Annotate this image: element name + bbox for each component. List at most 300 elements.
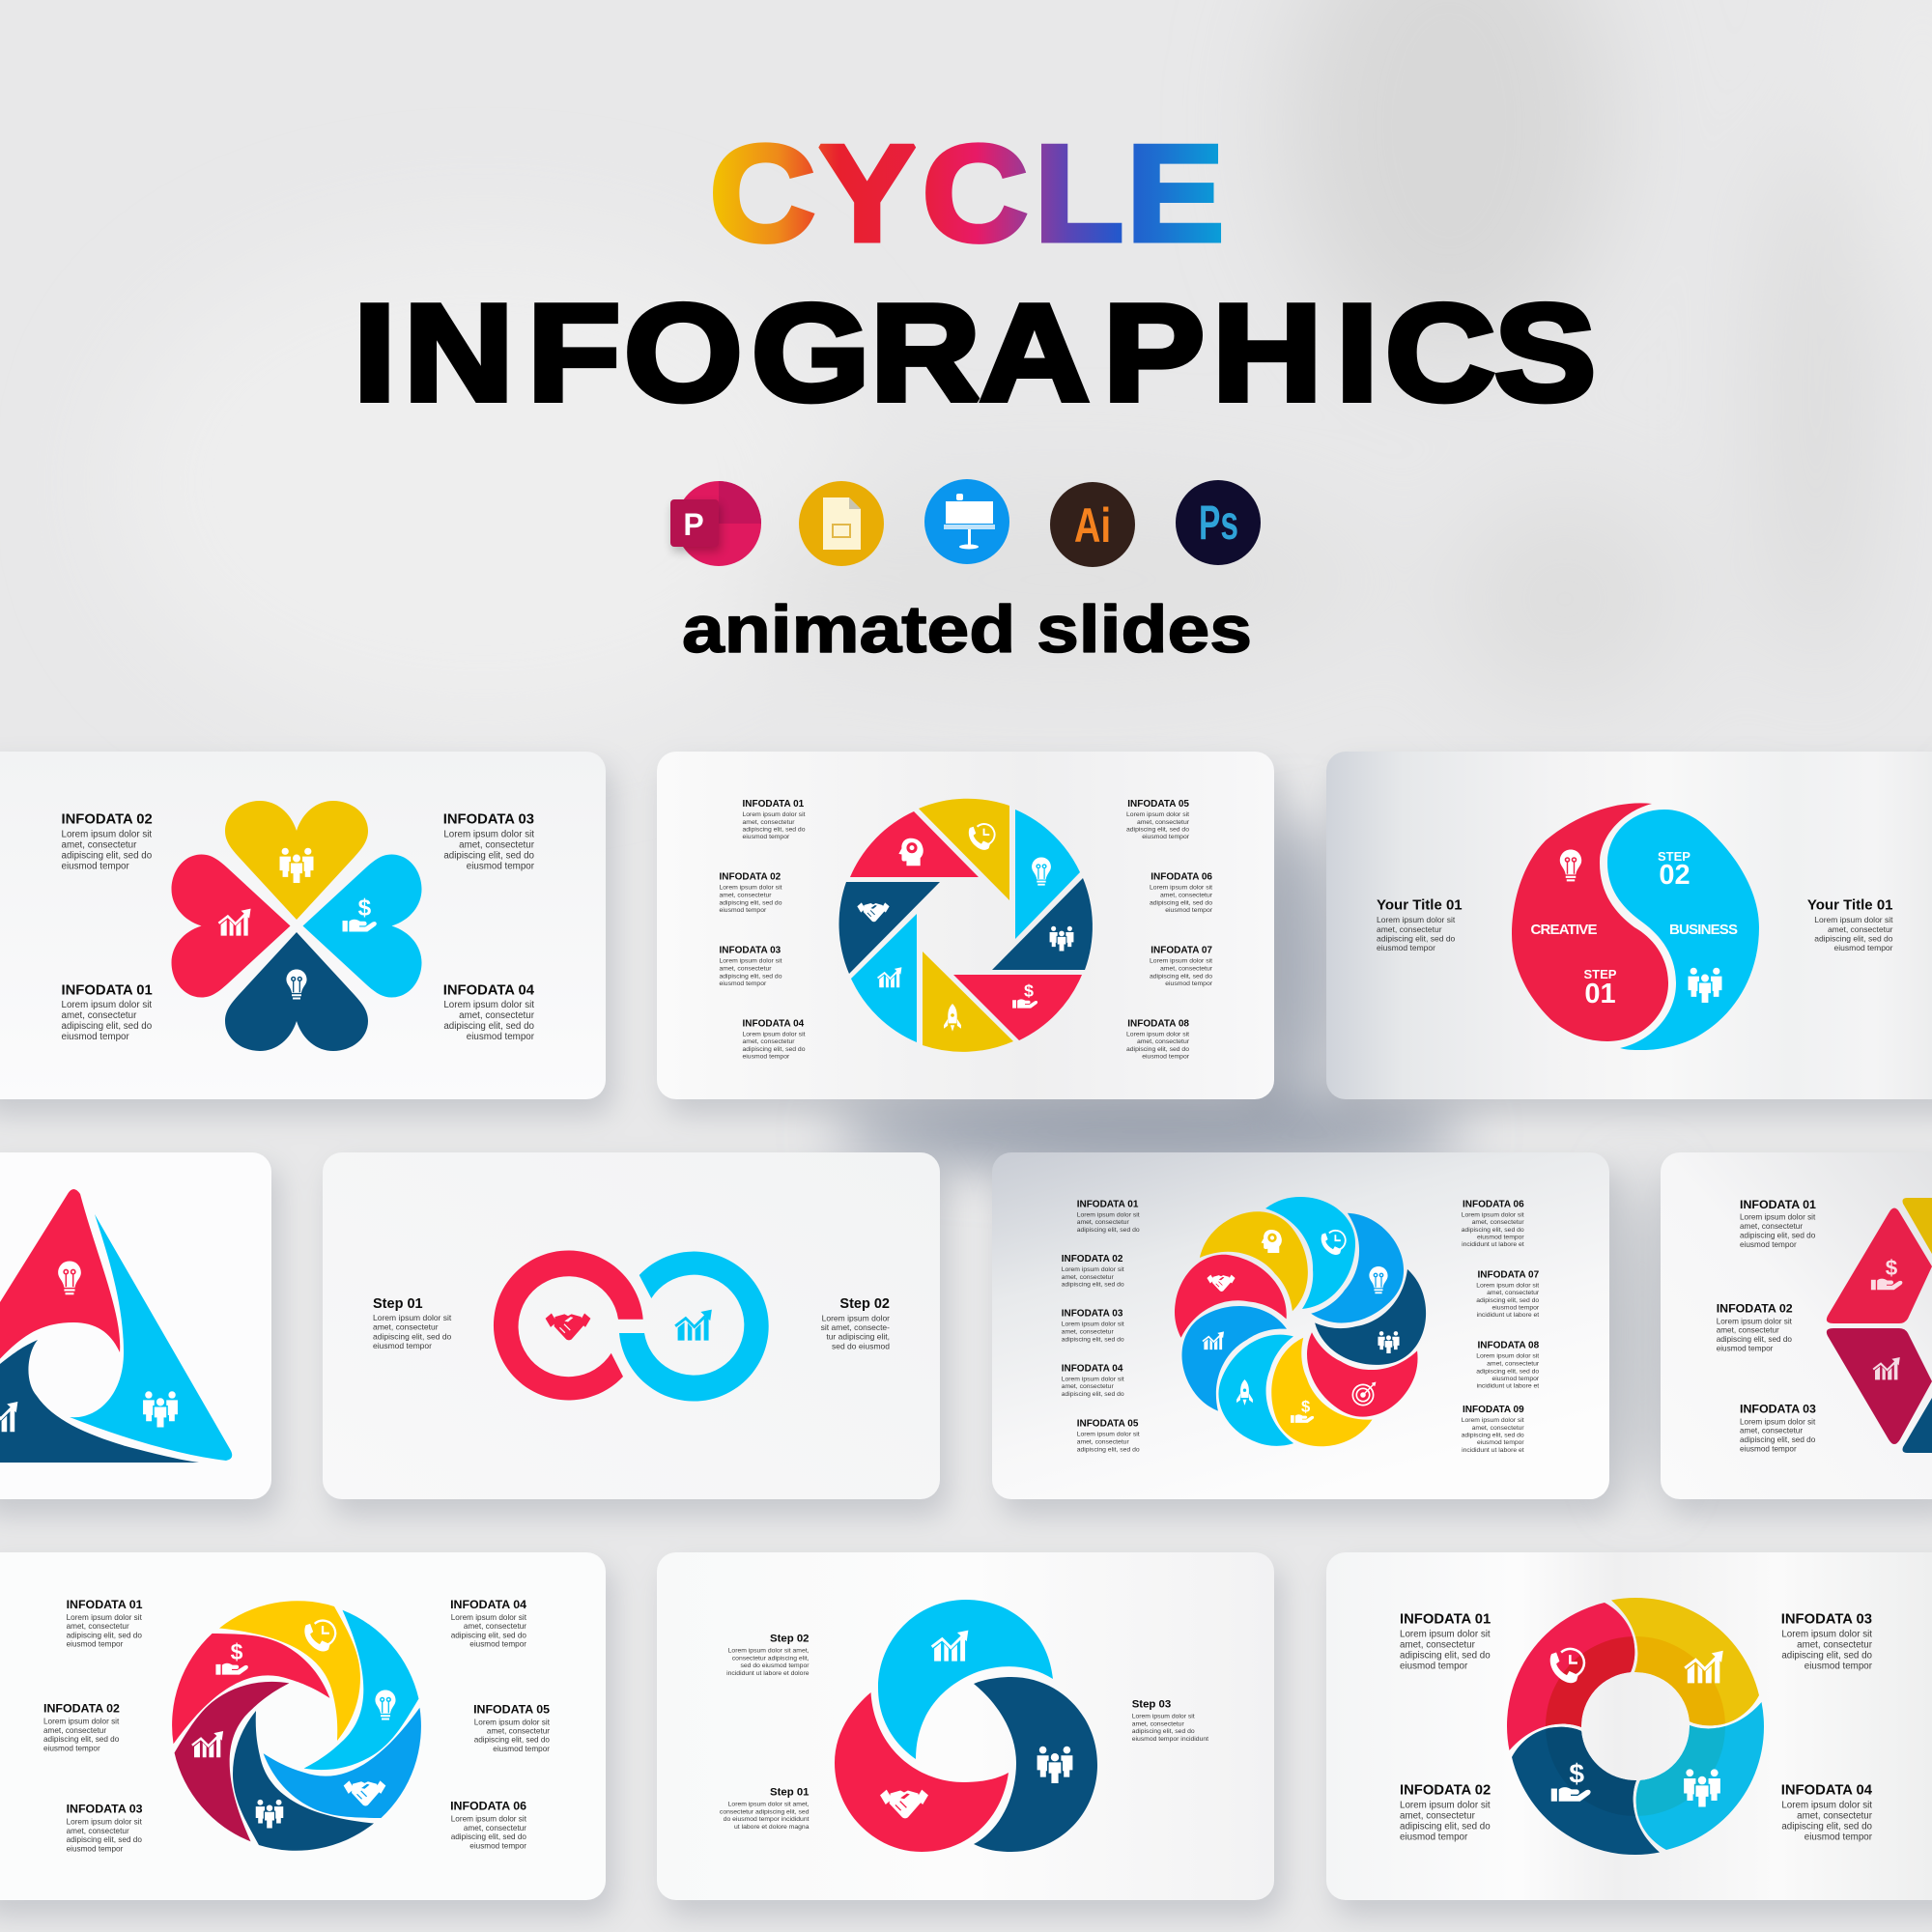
text: INFODATA 08: Lorem ipsum dolor sit — [1126, 1031, 1189, 1037]
text: left title: Lorem ipsum dolor sit — [1377, 915, 1455, 924]
text: step 01: ut labore et dolore magna — [734, 1824, 810, 1831]
text: INFODATA 03: adipiscing elit, sed do — [443, 851, 535, 862]
text: INFODATA 02: adipiscing elit, sed do — [719, 899, 782, 906]
icon: handshake — [546, 1314, 590, 1340]
text: INFODATA 02: INFODATA 02 — [43, 1702, 120, 1716]
text: INFODATA 03: adipiscing elit, sed do — [67, 1835, 142, 1844]
text: INFODATA 01: amet, consectetur — [62, 1010, 137, 1021]
text: INFODATA 02: eiusmod tempor — [62, 862, 129, 872]
text: INFODATA 01: Lorem ipsum dolor sit — [62, 1000, 152, 1010]
text: INFODATA 02: amet, consectetur — [1717, 1326, 1779, 1335]
text: INFODATA 02: INFODATA 02 — [62, 811, 153, 827]
text: INFODATA 06 — [1462, 1199, 1524, 1248]
text: INFODATA 08: amet, consectetur — [1137, 1038, 1190, 1045]
text: INFODATA 02: amet, consectetur — [719, 893, 772, 898]
text: step 01: adipiscing elit, sed do — [373, 1331, 452, 1341]
text: INFODATA 05: adipiscing elit, sed do — [1126, 827, 1189, 834]
text: INFODATA 02 — [1062, 1254, 1124, 1289]
text: INFODATA 02: adipiscing elit, sed do — [1717, 1335, 1792, 1344]
icon: Illustrator — [1050, 482, 1135, 567]
subtitle: animated slides — [682, 592, 1252, 667]
text: INFODATA 07: eiusmod tempor — [1492, 1304, 1540, 1312]
text: INFODATA 05: Lorem ipsum dolor sit — [474, 1718, 550, 1726]
icon: head gear — [898, 838, 923, 866]
text: INFODATA 06: adipiscing elit, sed do — [451, 1833, 526, 1841]
chart: heart clover — [172, 801, 421, 1051]
text: INFODATA 06 — [1150, 872, 1213, 914]
text: INFODATA 05: eiusmod tempor — [493, 1745, 550, 1753]
text: INFODATA 06: adipiscing elit, sed do — [1150, 899, 1212, 906]
text: INFODATA 07: adipiscing elit, sed do — [1150, 973, 1212, 980]
text: INFODATA 06: amet, consectetur — [1472, 1219, 1524, 1226]
icon: Photoshop — [1176, 480, 1261, 565]
panel: six blade swirl slide — [0, 1552, 606, 1900]
text: INFODATA 01: INFODATA 01 — [62, 982, 153, 998]
text: INFODATA 04: amet, consectetur — [464, 1622, 526, 1631]
text: INFODATA 09 — [1462, 1405, 1524, 1454]
text: INFODATA 01 — [1740, 1198, 1816, 1249]
text: INFODATA 01: eiusmod tempor — [67, 1640, 124, 1649]
text: INFODATA 06: eiusmod tempor — [1477, 1235, 1524, 1240]
label: step 02: STEP — [1658, 849, 1690, 864]
text: INFODATA 01: amet, consectetur — [67, 1622, 129, 1631]
text: INFODATA 01: eiusmod tempor — [62, 1032, 129, 1042]
icon: Illustrator: Ai — [1074, 498, 1111, 553]
icon: handshake — [344, 1780, 385, 1805]
text: step 02: tur adipiscing elit, — [826, 1332, 890, 1342]
icon: clock — [304, 1621, 335, 1651]
text: INFODATA 05: adipiscing elit, sed do — [1077, 1446, 1140, 1453]
text: INFODATA 08: adipiscing elit, sed do — [1476, 1368, 1539, 1375]
text: step 01: amet, consectetur — [373, 1322, 439, 1332]
text: INFODATA 08: INFODATA 08 — [1477, 1341, 1540, 1351]
icon: target — [1352, 1382, 1376, 1406]
text: INFODATA 03 — [67, 1803, 143, 1853]
text: INFODATA 05 — [473, 1702, 551, 1753]
text: INFODATA 02: Lorem ipsum dolor sit — [1400, 1801, 1491, 1811]
text: INFODATA 06: eiusmod tempor — [469, 1841, 526, 1850]
icon: chart — [932, 1631, 968, 1662]
text: INFODATA 04: eiusmod tempor — [1804, 1833, 1873, 1843]
icon: people — [1037, 1747, 1072, 1783]
text: INFODATA 03: amet, consectetur — [1797, 1640, 1873, 1651]
text: INFODATA 06: Lorem ipsum dolor sit — [1462, 1211, 1524, 1218]
icon: people — [1689, 968, 1721, 1003]
text: INFODATA 06: adipiscing elit, sed do — [1462, 1227, 1524, 1234]
text: right title: eiusmod tempor — [1834, 943, 1893, 952]
icon: handshake — [857, 902, 890, 922]
text: INFODATA 02: Lorem ipsum dolor sit — [1717, 1317, 1792, 1325]
text: INFODATA 04 — [443, 982, 535, 1042]
text: step 02 — [726, 1633, 810, 1677]
text: INFODATA 03: eiusmod tempor — [1740, 1444, 1797, 1453]
text: step 02: Step 02 — [770, 1633, 810, 1644]
chart: infinity rings — [494, 1250, 769, 1402]
text: INFODATA 02: adipiscing elit, sed do — [1400, 1822, 1491, 1833]
text: INFODATA 04: Lorem ipsum dolor sit — [1062, 1376, 1124, 1382]
text: INFODATA 07: INFODATA 07 — [1477, 1269, 1540, 1280]
text: INFODATA 01: amet, consectetur — [1077, 1219, 1129, 1226]
text: INFODATA 04: INFODATA 04 — [450, 1598, 526, 1611]
text: INFODATA 04: adipiscing elit, sed do — [742, 1046, 806, 1053]
text: INFODATA 01 — [742, 799, 806, 840]
text: INFODATA 01: adipiscing elit, sed do — [1740, 1231, 1816, 1239]
text: right title — [1807, 897, 1893, 952]
text: INFODATA 04: amet, consectetur — [459, 1010, 535, 1021]
text: step 01: do eiusmod tempor incididunt — [724, 1816, 810, 1823]
text: INFODATA 04: amet, consectetur — [1797, 1811, 1873, 1822]
text: INFODATA 05: Lorem ipsum dolor sit — [1126, 811, 1189, 818]
text: INFODATA 09: incididunt ut labore et — [1462, 1447, 1524, 1454]
text: INFODATA 08 — [1476, 1341, 1540, 1389]
text: INFODATA 09: eiusmod tempor — [1477, 1439, 1524, 1446]
panel: triangle swirl slide — [0, 1152, 271, 1499]
title: INFOGRAPHICS: INFOGRAPHICS — [354, 275, 1596, 429]
text: step 01: consectetur adipiscing elit, sed — [720, 1808, 810, 1815]
text: INFODATA 04: Lorem ipsum dolor sit — [443, 1000, 534, 1010]
text: left title — [1377, 897, 1463, 952]
text: INFODATA 03: amet, consectetur — [719, 966, 772, 972]
text: INFODATA 08 — [1126, 1018, 1190, 1061]
text: INFODATA 01: adipiscing elit, sed do — [62, 1021, 153, 1032]
text: step 02: sit amet, consecte- — [821, 1322, 890, 1332]
text: INFODATA 08: incididunt ut labore et — [1477, 1383, 1539, 1389]
text: INFODATA 07: amet, consectetur — [1487, 1290, 1540, 1296]
text: INFODATA 03: eiusmod tempor — [467, 862, 535, 872]
text: INFODATA 04: amet, consectetur — [742, 1038, 795, 1045]
icon: people — [256, 1800, 283, 1828]
icon: handshake — [880, 1790, 928, 1818]
text: INFODATA 05 — [1077, 1419, 1140, 1453]
icon: Photoshop: Ps — [1199, 496, 1238, 550]
text: INFODATA 02: Lorem ipsum dolor sit — [1062, 1266, 1124, 1273]
text: INFODATA 05 — [1126, 799, 1190, 840]
chart: three crescents — [835, 1600, 1097, 1852]
text: INFODATA 08: INFODATA 08 — [1127, 1018, 1189, 1029]
panel: nine petal swirl slide — [992, 1152, 1609, 1499]
label: creative: CREATIVE — [1530, 922, 1598, 938]
text: INFODATA 03: Lorem ipsum dolor sit — [67, 1818, 142, 1827]
text: right title: amet, consectetur — [1828, 924, 1893, 934]
text: INFODATA 02: amet, consectetur — [43, 1726, 106, 1735]
text: INFODATA 02: Lorem ipsum dolor sit — [719, 885, 781, 892]
text: INFODATA 02: eiusmod tempor — [43, 1744, 100, 1752]
icon: people — [143, 1391, 178, 1428]
text: INFODATA 05: amet, consectetur — [487, 1727, 550, 1735]
text: INFODATA 07: Lorem ipsum dolor sit — [1150, 958, 1212, 965]
text: INFODATA 03 — [1781, 1611, 1873, 1672]
text: step 02: consectetur adipiscing elit, — [732, 1655, 810, 1662]
chart: hexagon segments — [1827, 1198, 1932, 1453]
icon: people — [1050, 926, 1073, 951]
panel: three crescents slide — [657, 1552, 1274, 1900]
text: INFODATA 01: adipiscing elit, sed do — [67, 1631, 142, 1639]
panel: hexagon slide — [1661, 1152, 1932, 1499]
text: INFODATA 05: amet, consectetur — [1137, 819, 1190, 826]
icon: people — [1378, 1331, 1400, 1353]
text: INFODATA 03: INFODATA 03 — [1740, 1403, 1816, 1416]
text: INFODATA 05: Lorem ipsum dolor sit — [1077, 1432, 1140, 1438]
text: INFODATA 02 — [62, 811, 153, 872]
text: INFODATA 09: Lorem ipsum dolor sit — [1462, 1417, 1524, 1424]
text: step 03: eiusmod tempor incididunt — [1132, 1736, 1208, 1743]
icon: chart — [1873, 1357, 1900, 1379]
text: INFODATA 02: amet, consectetur — [1400, 1811, 1476, 1822]
text: INFODATA 03: eiusmod tempor — [719, 980, 767, 987]
text: step 01: Step 01 — [373, 1296, 423, 1312]
text: INFODATA 04: adipiscing elit, sed do — [451, 1631, 526, 1639]
icon: PowerPoint: P — [683, 507, 704, 542]
text: INFODATA 01: INFODATA 01 — [742, 799, 805, 810]
text: INFODATA 06: Lorem ipsum dolor sit — [1150, 885, 1212, 892]
chart: nine petal swirl — [1163, 1191, 1435, 1462]
text: INFODATA 05: INFODATA 05 — [1127, 799, 1189, 810]
icon: growth chart — [218, 909, 251, 936]
text: INFODATA 05: amet, consectetur — [1077, 1439, 1129, 1445]
text: INFODATA 03: eiusmod tempor — [67, 1844, 124, 1853]
text: INFODATA 04 — [742, 1018, 806, 1061]
text: INFODATA 07: INFODATA 07 — [1151, 946, 1212, 956]
label: step 01: STEP — [1584, 967, 1617, 981]
icon: PowerPoint — [670, 481, 761, 566]
text: INFODATA 07 — [1476, 1269, 1540, 1319]
text: INFODATA 02: amet, consectetur — [62, 840, 137, 851]
chart: yin yang — [1512, 803, 1759, 1050]
text: INFODATA 06: amet, consectetur — [464, 1824, 526, 1833]
icon: people — [280, 848, 313, 883]
icon: bulb — [1369, 1266, 1388, 1293]
text: INFODATA 03: Lorem ipsum dolor sit — [443, 830, 534, 840]
text: INFODATA 01: Lorem ipsum dolor sit — [67, 1613, 142, 1622]
text: INFODATA 01 — [1077, 1199, 1140, 1234]
text: INFODATA 01: Lorem ipsum dolor sit — [742, 811, 805, 818]
panel: infinity slide — [323, 1152, 940, 1499]
text: step 03: amet, consectetur — [1132, 1720, 1184, 1727]
icon: chart — [1685, 1651, 1723, 1683]
text: INFODATA 04: amet, consectetur — [1062, 1383, 1114, 1390]
text: right title: Lorem ipsum dolor sit — [1814, 915, 1893, 924]
text: step 02: Lorem ipsum dolor — [822, 1313, 890, 1322]
text: INFODATA 02: Lorem ipsum dolor sit — [62, 830, 152, 840]
icon: rocket — [944, 1004, 961, 1032]
text: INFODATA 04 — [1062, 1363, 1124, 1398]
text: INFODATA 02: Lorem ipsum dolor sit — [43, 1718, 119, 1726]
icon: hand — [1551, 1758, 1591, 1802]
text: INFODATA 02 — [43, 1702, 120, 1752]
text: INFODATA 01: INFODATA 01 — [67, 1598, 143, 1611]
text: INFODATA 04: eiusmod tempor — [469, 1640, 526, 1649]
text: INFODATA 02: amet, consectetur — [1062, 1274, 1114, 1281]
card drop shadows — [0, 765, 1932, 1916]
text: INFODATA 02: adipiscing elit, sed do — [43, 1735, 120, 1744]
text: step 02 — [821, 1296, 890, 1350]
text: INFODATA 01: Lorem ipsum dolor sit — [1077, 1211, 1140, 1218]
text: INFODATA 08: eiusmod tempor — [1142, 1053, 1190, 1061]
label: step 02: 02 — [1659, 860, 1690, 891]
text: INFODATA 02: adipiscing elit, sed do — [62, 851, 153, 862]
text: left title: Your Title 01 — [1377, 897, 1463, 914]
chart: six blade swirl — [150, 1597, 443, 1855]
text: step 01 — [720, 1786, 810, 1831]
text: INFODATA 01: INFODATA 01 — [1740, 1198, 1816, 1211]
icon: hand — [1871, 1256, 1902, 1290]
text: INFODATA 06: Lorem ipsum dolor sit — [451, 1815, 526, 1824]
text: INFODATA 03: amet, consectetur — [1740, 1427, 1803, 1435]
text: INFODATA 08: Lorem ipsum dolor sit — [1476, 1353, 1539, 1360]
text: INFODATA 01 — [67, 1598, 143, 1649]
text: INFODATA 03 — [1740, 1403, 1816, 1453]
text: INFODATA 04: adipiscing elit, sed do — [1781, 1822, 1873, 1833]
text: INFODATA 04: INFODATA 04 — [1781, 1782, 1873, 1798]
text: INFODATA 03: adipiscing elit, sed do — [719, 973, 782, 980]
text: INFODATA 05: INFODATA 05 — [1077, 1419, 1139, 1430]
text: step 02: Step 02 — [839, 1296, 890, 1312]
text: INFODATA 07: amet, consectetur — [1160, 966, 1213, 972]
icon: chart — [878, 967, 901, 987]
icon: Keynote — [924, 479, 1009, 564]
text: INFODATA 03: Lorem ipsum dolor sit — [1781, 1630, 1872, 1640]
background light and shadow wash — [116, 0, 1932, 1497]
text: INFODATA 03: INFODATA 03 — [1062, 1309, 1123, 1320]
text: INFODATA 03: Lorem ipsum dolor sit — [1740, 1417, 1815, 1426]
text: INFODATA 07: adipiscing elit, sed do — [1476, 1297, 1539, 1304]
text: INFODATA 06: amet, consectetur — [1160, 893, 1213, 898]
title: CYCLE: CYCLE — [709, 118, 1224, 270]
text: INFODATA 04: INFODATA 04 — [1062, 1363, 1123, 1374]
text: INFODATA 05: INFODATA 05 — [473, 1702, 550, 1716]
text: INFODATA 02 — [1717, 1302, 1793, 1352]
chart: four segment ring — [1507, 1598, 1764, 1855]
text: INFODATA 03 — [719, 946, 782, 987]
text: INFODATA 01: INFODATA 01 — [1400, 1611, 1491, 1627]
text: INFODATA 03: INFODATA 03 — [443, 811, 534, 827]
text: INFODATA 01: adipiscing elit, sed do — [1400, 1651, 1491, 1662]
software icons row — [670, 479, 1261, 567]
text: step 02: incididunt ut labore et dolore — [726, 1670, 810, 1677]
text: INFODATA 02: INFODATA 02 — [1062, 1254, 1123, 1264]
text: INFODATA 04: Lorem ipsum dolor sit — [451, 1613, 526, 1622]
text: step 01: eiusmod tempor — [373, 1341, 432, 1350]
text: INFODATA 02: eiusmod tempor — [719, 907, 767, 914]
panel: heart clover slide — [0, 752, 606, 1099]
text: step 03: adipiscing elit, sed do — [1132, 1728, 1195, 1735]
text: INFODATA 02: INFODATA 02 — [719, 872, 781, 883]
text: step 01: Step 01 — [770, 1786, 810, 1798]
text: INFODATA 05: adipiscing elit, sed do — [474, 1736, 550, 1745]
text: INFODATA 05: eiusmod tempor — [1142, 834, 1190, 840]
text: step 03: Step 03 — [1132, 1699, 1171, 1711]
icon: bulb — [375, 1690, 396, 1720]
text: INFODATA 09: adipiscing elit, sed do — [1462, 1433, 1524, 1439]
text: INFODATA 06 — [450, 1800, 527, 1850]
text: INFODATA 03 — [1062, 1309, 1124, 1343]
text: INFODATA 09: INFODATA 09 — [1463, 1405, 1524, 1415]
text: INFODATA 02: eiusmod tempor — [1717, 1344, 1774, 1352]
icon: chart — [192, 1731, 223, 1757]
icon: chart — [675, 1310, 712, 1341]
text: INFODATA 04: adipiscing elit, sed do — [443, 1021, 535, 1032]
text: INFODATA 06: incididunt ut labore et — [1462, 1241, 1524, 1248]
text: INFODATA 03: adipiscing elit, sed do — [1781, 1651, 1873, 1662]
text: INFODATA 01: adipiscing elit, sed do — [742, 827, 806, 834]
text: INFODATA 01: eiusmod tempor — [742, 834, 790, 840]
text: INFODATA 03: Lorem ipsum dolor sit — [719, 958, 781, 965]
text: INFODATA 01: eiusmod tempor — [1400, 1662, 1468, 1672]
text: INFODATA 04: eiusmod tempor — [742, 1053, 790, 1061]
text: INFODATA 01: amet, consectetur — [1740, 1222, 1803, 1231]
text: INFODATA 03: adipiscing elit, sed do — [1062, 1336, 1124, 1343]
text: INFODATA 03: amet, consectetur — [1062, 1329, 1114, 1335]
text: INFODATA 01: amet, consectetur — [1400, 1640, 1476, 1651]
icon: chart — [1203, 1331, 1224, 1350]
text: INFODATA 01: amet, consectetur — [742, 819, 795, 826]
text: INFODATA 04 — [1781, 1782, 1873, 1843]
label: business: BUSINESS — [1669, 922, 1738, 938]
icon: head gear — [1262, 1230, 1282, 1253]
text: INFODATA 08: adipiscing elit, sed do — [1126, 1046, 1189, 1053]
text: INFODATA 03: INFODATA 03 — [719, 946, 781, 956]
text: INFODATA 04: Lorem ipsum dolor sit — [1781, 1801, 1872, 1811]
text: INFODATA 04: INFODATA 04 — [742, 1018, 805, 1029]
text: INFODATA 03: amet, consectetur — [67, 1827, 129, 1835]
text: INFODATA 04: eiusmod tempor — [467, 1032, 535, 1042]
text: step 02: Lorem ipsum dolor sit amet, — [728, 1648, 810, 1655]
text: INFODATA 08: eiusmod tempor — [1492, 1376, 1540, 1382]
text: step 03 — [1132, 1699, 1208, 1743]
chart: shutter segments — [839, 799, 1093, 1052]
text: step 01: Lorem ipsum dolor sit — [373, 1313, 451, 1322]
text: INFODATA 03: Lorem ipsum dolor sit — [1062, 1321, 1124, 1328]
text: INFODATA 02: INFODATA 02 — [1400, 1782, 1491, 1798]
text: INFODATA 03: amet, consectetur — [459, 840, 535, 851]
icon: clock phone — [969, 824, 995, 850]
icon: bulb — [1560, 850, 1581, 881]
panel: yin yang slide — [1326, 752, 1932, 1099]
text: INFODATA 01: adipiscing elit, sed do — [1077, 1227, 1140, 1234]
icon: hand with dollar — [343, 895, 377, 931]
chart: triangle swirl — [0, 1189, 232, 1463]
icon: rocket — [1236, 1379, 1253, 1406]
text: INFODATA 07: incididunt ut labore et — [1477, 1312, 1539, 1319]
text: INFODATA 04: INFODATA 04 — [443, 982, 535, 998]
icon: handshake — [1207, 1275, 1236, 1292]
text: INFODATA 06: INFODATA 06 — [1463, 1199, 1524, 1209]
text: step 02: sed do eiusmod — [832, 1341, 890, 1350]
text: step 01: Lorem ipsum dolor sit amet, — [728, 1802, 810, 1808]
panel: four segment ring slide — [1326, 1552, 1932, 1900]
text: step 03: Lorem ipsum dolor sit — [1132, 1714, 1195, 1720]
icon: bulb — [1032, 858, 1051, 886]
text: left title: adipiscing elit, sed do — [1377, 934, 1456, 944]
icon: Google Slides — [799, 481, 884, 566]
text: INFODATA 08: amet, consectetur — [1487, 1360, 1540, 1368]
icon: hand — [1012, 980, 1037, 1009]
text: INFODATA 02: INFODATA 02 — [1717, 1302, 1793, 1316]
text: INFODATA 04: Lorem ipsum dolor sit — [742, 1031, 805, 1037]
text: INFODATA 03: eiusmod tempor — [1804, 1662, 1873, 1672]
icon: hand — [215, 1639, 248, 1675]
text: INFODATA 02: eiusmod tempor — [1400, 1833, 1468, 1843]
text: INFODATA 01: INFODATA 01 — [1077, 1199, 1139, 1209]
text: INFODATA 03 — [443, 811, 535, 872]
icon: clock — [1550, 1649, 1584, 1683]
text: INFODATA 01: Lorem ipsum dolor sit — [1400, 1630, 1491, 1640]
text: INFODATA 04 — [450, 1598, 527, 1649]
text: INFODATA 09: amet, consectetur — [1472, 1425, 1524, 1432]
text: INFODATA 03: INFODATA 03 — [67, 1803, 143, 1816]
text: left title: eiusmod tempor — [1377, 943, 1435, 952]
text: right title: adipiscing elit, sed do — [1814, 934, 1893, 944]
